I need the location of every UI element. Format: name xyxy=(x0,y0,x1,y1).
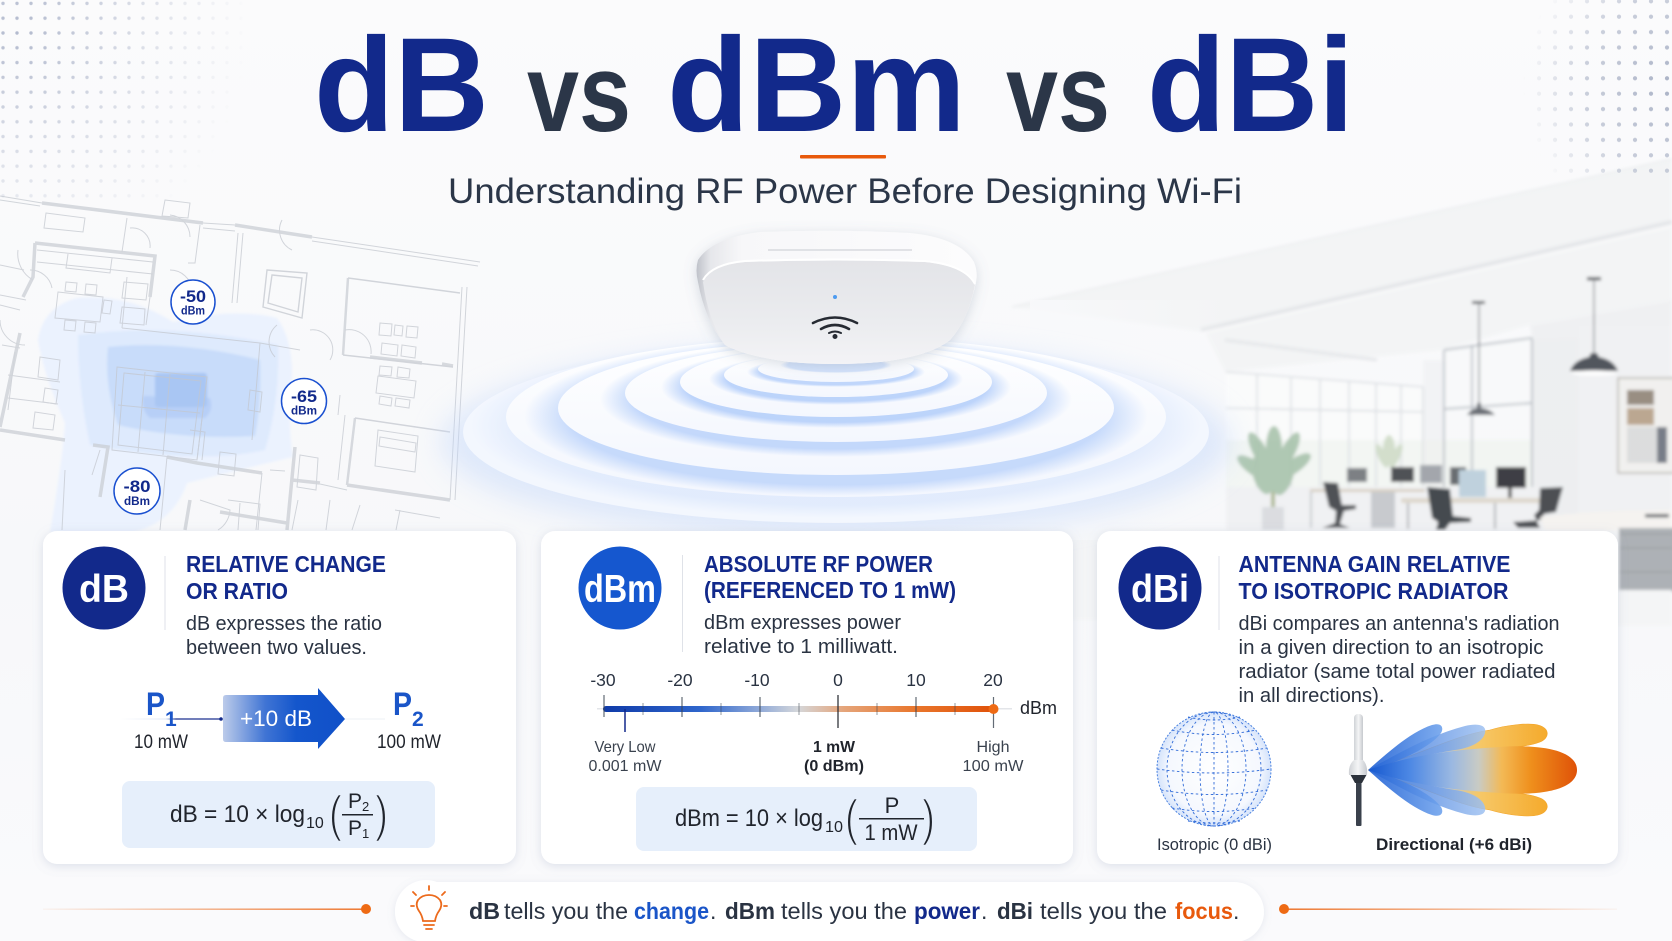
background: office scene xyxy=(1000,159,1672,626)
chairs xyxy=(1322,482,1356,528)
badge: -65 dBm xyxy=(282,378,326,424)
formula box: ) xyxy=(375,786,388,842)
formula box: P xyxy=(348,790,362,813)
dBm scale: Very Low xyxy=(594,739,656,756)
heading xyxy=(704,551,956,603)
formula box xyxy=(122,781,435,848)
ratio arrow diagram: P xyxy=(393,686,412,722)
badge: -65 dBm: dBm xyxy=(291,404,317,418)
desks and monitors xyxy=(1310,465,1672,592)
formula box: 1 mW xyxy=(864,820,918,845)
takeaway pill xyxy=(395,880,1264,941)
heading: ANTENNA GAIN RELATIVE xyxy=(1238,551,1510,577)
title underline accent xyxy=(800,155,886,158)
title: dB xyxy=(314,11,489,160)
badge: -80 dBm: dBm xyxy=(124,494,150,508)
takeaway sentence: . xyxy=(981,898,987,924)
ratio arrow diagram: 2 xyxy=(412,708,424,731)
formula box: 10 xyxy=(306,815,324,832)
antenna xyxy=(1349,714,1367,826)
directional radiation pattern xyxy=(1368,724,1577,816)
ratio arrow diagram xyxy=(120,686,441,753)
floor plan drawing xyxy=(0,196,480,530)
floor plan with signal heatmap xyxy=(0,196,480,532)
formula box: 2 xyxy=(362,799,369,814)
description xyxy=(186,612,382,659)
formula box: dB = 10 × log xyxy=(170,801,305,828)
dBm scale: 100 mW xyxy=(962,758,1024,775)
badge: -80 dBm: -80 xyxy=(124,477,150,496)
title: vs xyxy=(527,32,631,155)
dot pattern: top left xyxy=(1,2,214,198)
heading: TO ISOTROPIC RADIATOR xyxy=(1238,578,1509,604)
takeaway sentence: power xyxy=(914,898,980,924)
formula box: ( xyxy=(845,790,858,846)
description xyxy=(704,611,901,658)
dBm scale: -10 xyxy=(744,670,770,690)
access point device xyxy=(696,231,977,364)
takeaway sentence: focus xyxy=(1175,898,1233,924)
badge: -50 dBm: -50 xyxy=(180,287,206,306)
ratio arrow diagram: 100 mW xyxy=(377,732,441,753)
dBm scale: High xyxy=(976,739,1010,756)
dBm scale: -30 xyxy=(590,670,616,690)
title xyxy=(314,11,1354,160)
description: radiator (same total power radiated xyxy=(1238,660,1556,683)
isotropic label: Isotropic (0 dBi) xyxy=(1157,836,1272,854)
formula box: P xyxy=(885,793,899,818)
description: relative to 1 milliwatt. xyxy=(704,635,898,658)
badge: dBm xyxy=(578,546,662,630)
badge: dBi xyxy=(1118,546,1202,630)
dBm scale: dBm xyxy=(1020,698,1057,718)
badge: -65 dBm: -65 xyxy=(291,387,317,406)
takeaway sentence: dBm xyxy=(725,898,775,924)
icon: wifi xyxy=(813,318,857,338)
dBm scale: (0 dBm) xyxy=(804,758,864,775)
description: in a given direction to an isotropic xyxy=(1238,636,1544,659)
panel: dB xyxy=(43,531,516,864)
takeaway sentence: . xyxy=(710,898,716,924)
ratio arrow diagram: 1 xyxy=(165,708,177,731)
heading: OR RATIO xyxy=(186,578,288,604)
takeaway sentence xyxy=(469,898,1239,924)
takeaway line: right xyxy=(1279,904,1617,914)
takeaway line: left xyxy=(43,904,371,914)
dBm scale: 0 xyxy=(833,670,843,690)
panel: dBm xyxy=(541,531,1073,864)
isotropic sphere xyxy=(1157,712,1271,826)
heading: (REFERENCED TO 1 mW) xyxy=(704,577,956,603)
description: dBi compares an antenna's radiation xyxy=(1238,612,1560,635)
badge: dB xyxy=(62,546,146,630)
takeaway sentence: . xyxy=(1233,898,1239,924)
title: dBm xyxy=(667,11,966,160)
ratio arrow diagram: 10 mW xyxy=(134,732,188,753)
badge: -50 dBm xyxy=(171,280,215,324)
ratio arrow diagram: +10 dB xyxy=(240,706,312,731)
status LED xyxy=(833,295,837,299)
picture frame xyxy=(1618,378,1672,473)
plant xyxy=(1234,426,1405,530)
dot pattern: top right xyxy=(1537,0,1670,173)
takeaway sentence: dB xyxy=(469,898,500,924)
description: dB expresses the ratio xyxy=(186,612,382,635)
description: in all directions). xyxy=(1238,684,1384,707)
badge: dB: dB xyxy=(79,568,129,611)
badge: -50 dBm: dBm xyxy=(181,304,205,318)
formula box: ( xyxy=(329,786,342,842)
badge: dBm: dBm xyxy=(584,568,656,611)
description: dBm expresses power xyxy=(704,611,901,634)
signal rings xyxy=(441,334,1231,538)
dBm scale: 20 xyxy=(983,670,1003,690)
formula box xyxy=(636,787,977,851)
formula box: P xyxy=(348,817,362,840)
icon: lightbulb xyxy=(395,880,457,941)
panel: dBi xyxy=(1097,531,1618,864)
pendant lights xyxy=(1467,277,1618,415)
subtitle: Understanding RF Power Before Designing Wi-Fi xyxy=(448,172,1242,211)
heading: ABSOLUTE RF POWER xyxy=(704,551,933,577)
formula box: 10 xyxy=(825,819,843,836)
dBm scale: 10 xyxy=(906,670,926,690)
directional label: Directional (+6 dBi) xyxy=(1376,835,1532,854)
takeaway sentence: dBi xyxy=(997,898,1033,924)
signal heatmap xyxy=(38,297,293,532)
dBm scale: 0.001 mW xyxy=(588,758,662,775)
takeaway sentence: tells you the xyxy=(504,898,628,924)
description: between two values. xyxy=(186,636,367,659)
badge: dBi: dBi xyxy=(1131,568,1189,611)
takeaway sentence: change xyxy=(634,898,709,924)
dBm scale xyxy=(588,670,1057,775)
takeaway sentence: tells you the xyxy=(781,898,907,924)
title: dBi xyxy=(1147,11,1354,160)
description xyxy=(1238,612,1560,707)
badge: -80 dBm xyxy=(114,468,160,514)
dBm scale: -20 xyxy=(667,670,693,690)
formula box: 1 xyxy=(362,826,369,841)
heading xyxy=(186,551,386,604)
takeaway sentence: tells you the xyxy=(1040,898,1167,924)
dBm scale: 1 mW xyxy=(813,739,856,756)
heading xyxy=(1238,551,1510,604)
formula box: ) xyxy=(922,790,935,846)
heading: RELATIVE CHANGE xyxy=(186,551,386,577)
ratio arrow diagram: P xyxy=(146,686,165,722)
formula box: dBm = 10 × log xyxy=(675,805,823,832)
title: vs xyxy=(1006,32,1110,155)
